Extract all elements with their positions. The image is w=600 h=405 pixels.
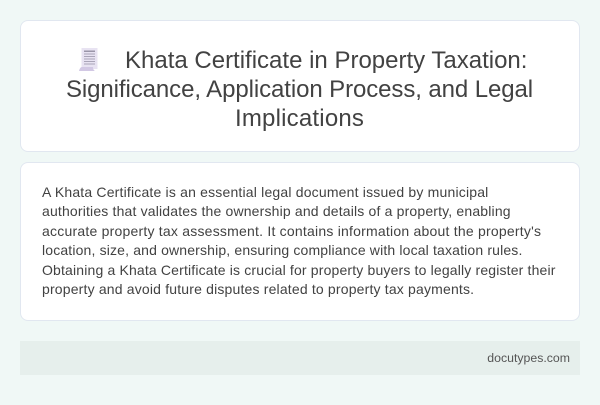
- title line 3: Implications: [235, 105, 364, 132]
- text line 4: location, size, and ownership, ensuring compliance with local taxation rules.: [42, 242, 522, 258]
- text line 1: A Khata Certificate is an essential legal document issued by municipal: [42, 184, 488, 200]
- title line 1: Khata Certificate in Property Taxation:: [125, 47, 527, 74]
- panel: title card: [20, 20, 580, 152]
- panel: description card: [20, 162, 580, 321]
- text line 5: Obtaining a Khata Certificate is crucial for property buyers to legally register their: [42, 262, 556, 278]
- footer bar: [20, 341, 580, 375]
- text line 6: property and avoid future disputes related to property tax payments.: [42, 281, 474, 297]
- text line 2: authorities that validates the ownership and details of a property, enabling: [42, 203, 511, 219]
- icon: document scroll: [79, 48, 98, 71]
- footer source text: docutypes.com: [487, 351, 570, 365]
- text line 3: accurate property tax assessment. It contains information about the property's: [42, 223, 541, 239]
- title line 2: Significance, Application Process, and Legal: [66, 76, 533, 103]
